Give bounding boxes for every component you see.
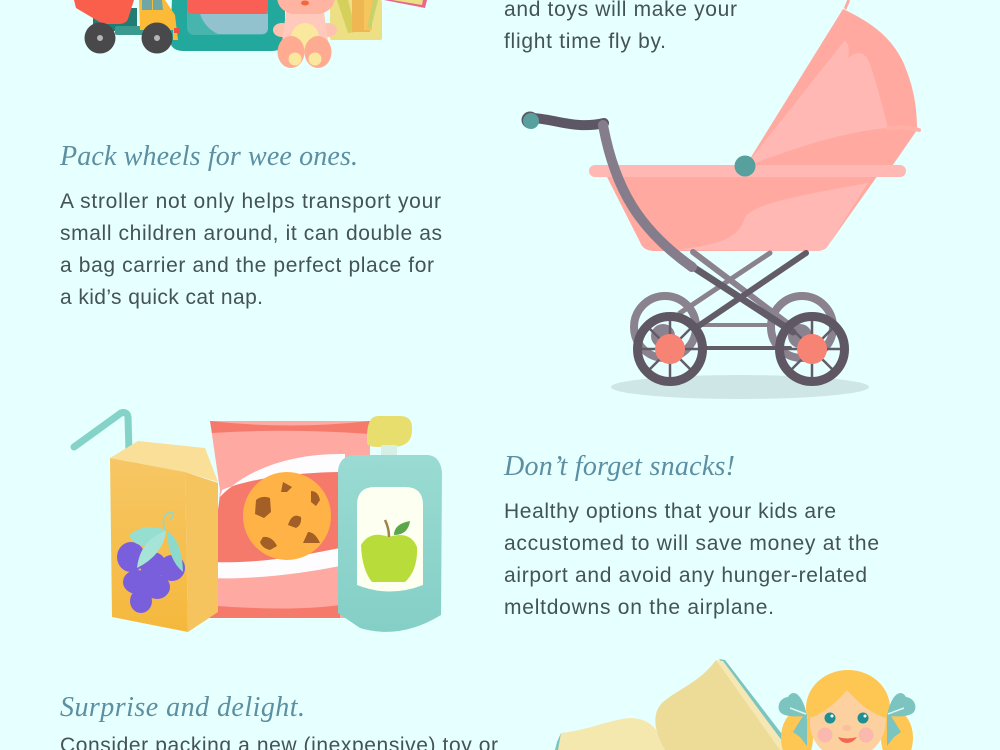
body text: small children around, it can double as <box>60 222 442 245</box>
body text: a kid’s quick cat nap. <box>60 286 263 309</box>
stroller joint <box>734 156 756 176</box>
stroller frame <box>634 252 833 358</box>
bow left <box>779 693 807 746</box>
face <box>810 690 886 750</box>
section: pack wheels <box>59 141 442 309</box>
icon: teddy bear <box>273 0 337 68</box>
icon: chips bag <box>204 421 370 618</box>
section: don't forget snacks <box>503 451 879 619</box>
body text <box>504 500 879 619</box>
stroller handle <box>522 112 692 267</box>
body text: meltdowns on the airplane. <box>504 596 774 619</box>
icon: grapes <box>117 512 185 613</box>
illustration: snacks <box>74 412 442 632</box>
body text: a bag carrier and the perfect place for <box>60 254 434 277</box>
icon: pink book <box>384 0 427 8</box>
hair <box>781 670 913 750</box>
icon: backpack <box>170 0 285 51</box>
illustration: girl with pigtails <box>779 670 915 750</box>
illustration: book <box>555 659 785 750</box>
illustration: travel toys <box>74 0 427 68</box>
body text: accustomed to will save money at the <box>504 532 879 555</box>
bow right <box>887 693 915 746</box>
icon: apple sauce pouch <box>338 416 442 632</box>
body text: A stroller not only helps transport your <box>60 190 441 213</box>
cheeks and mouth <box>818 725 874 743</box>
stroller basket <box>589 165 906 251</box>
icon: juice box <box>74 412 218 632</box>
heading: Don’t forget snacks! <box>503 451 735 482</box>
text block: toys continued: flight time fly by. <box>504 30 666 53</box>
illustration: baby stroller <box>522 0 919 399</box>
body text: Healthy options that your kids are <box>504 500 836 523</box>
body text <box>60 190 442 309</box>
ground shadow <box>611 375 869 399</box>
eyes <box>824 712 868 724</box>
icon: toy dump truck <box>74 0 180 54</box>
heading: Pack wheels for wee ones. <box>59 141 358 172</box>
stroller canopy <box>745 0 919 172</box>
section: surprise and delight <box>60 692 498 750</box>
body text: airport and avoid any hunger-related <box>504 564 867 587</box>
heading: Surprise and delight. <box>60 692 305 723</box>
text block: toys continued <box>504 0 737 53</box>
front wheel left <box>637 316 703 382</box>
front wheel right <box>779 316 845 382</box>
icon: pencil box <box>330 0 382 40</box>
